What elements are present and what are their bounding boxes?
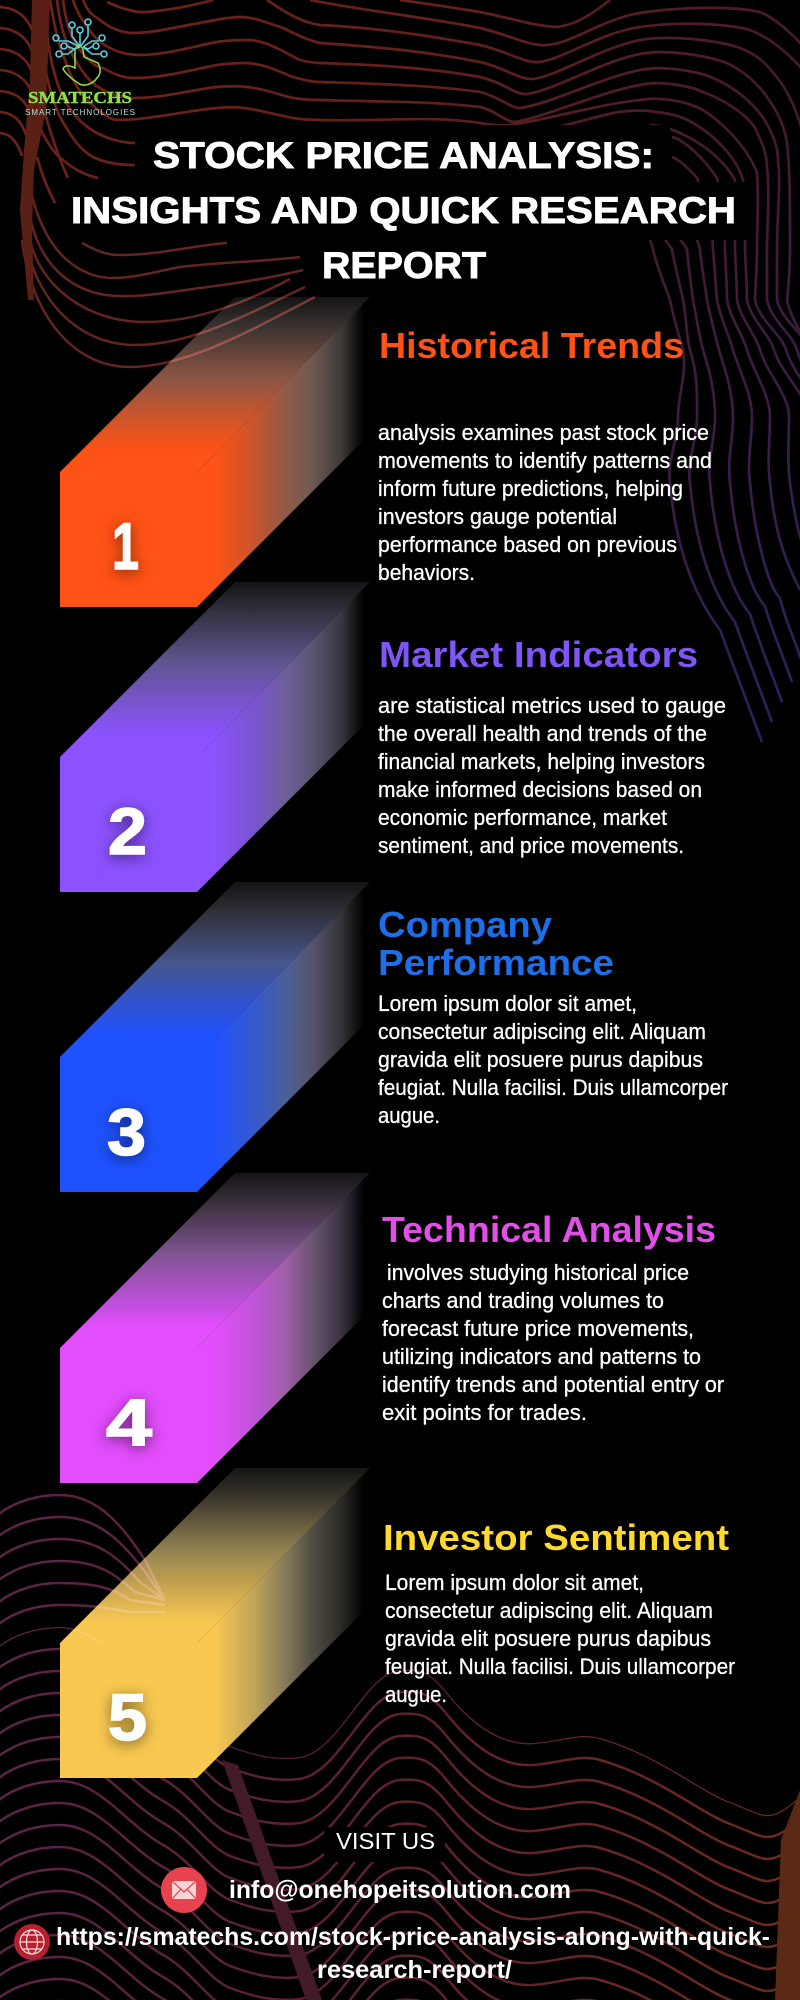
body [378, 991, 728, 1128]
visit us: VISIT US [336, 1828, 435, 1854]
heading: Technical Analysis [382, 1209, 716, 1250]
body: feugiat. Nulla facilisi. Duis ullamcorper [378, 1075, 728, 1100]
heading: Historical Trends [379, 325, 684, 366]
wave lines: top and right [0, 0, 800, 742]
body: performance based on previous [378, 532, 677, 557]
body: augue. [385, 1682, 447, 1707]
title [56, 125, 750, 295]
block 5 [60, 1468, 370, 1778]
block 3: 3 [107, 1095, 146, 1169]
body: analysis examines past stock price [378, 420, 709, 445]
block 1: 1 [112, 509, 139, 583]
block 4 [60, 1173, 370, 1483]
icon: circuit hand [53, 19, 107, 85]
body: augue. [378, 1103, 440, 1128]
block 1 [60, 297, 370, 607]
section 2 text [378, 634, 726, 858]
body: sentiment, and price movements. [378, 833, 684, 858]
heading: Market Indicators [379, 634, 698, 675]
body: behaviors. [378, 560, 475, 585]
title: REPORT [322, 245, 486, 286]
body: economic performance, market [378, 805, 667, 830]
logo name: SMATECHS [28, 88, 132, 107]
block 3 [60, 882, 370, 1192]
body: identify trends and potential entry or [382, 1372, 724, 1397]
block 2: 2 [108, 794, 147, 868]
body: Lorem ipsum dolor sit amet, [385, 1570, 644, 1595]
body: consectetur adipiscing elit. Aliquam [385, 1598, 713, 1623]
body [382, 1260, 724, 1425]
body: forecast future price movements, [382, 1316, 694, 1341]
section 3 text [378, 904, 728, 1128]
heading: Performance [378, 942, 614, 983]
body: movements to identify patterns and [378, 448, 712, 473]
block 4: 4 [106, 1385, 152, 1459]
body: feugiat. Nulla facilisi. Duis ullamcorper [385, 1654, 735, 1679]
email address: info@onehopeitsolution.com [229, 1876, 571, 1904]
block 2 [60, 582, 370, 892]
body [385, 1570, 735, 1707]
footer contact [14, 1827, 770, 1984]
body: investors gauge potential [378, 504, 617, 529]
body: the overall health and trends of the [378, 721, 707, 746]
body: gravida elit posuere purus dapibus [378, 1047, 703, 1072]
body: exit points for trades. [382, 1400, 587, 1425]
section 5 text [383, 1517, 735, 1707]
section 4 text [382, 1209, 724, 1425]
heading: Investor Sentiment [383, 1517, 729, 1558]
body: financial markets, helping investors [378, 749, 705, 774]
body: make informed decisions based on [378, 777, 702, 802]
icon: globe [14, 1924, 50, 1960]
body: charts and trading volumes to [382, 1288, 664, 1313]
body: utilizing indicators and patterns to [382, 1344, 701, 1369]
visit us [324, 1827, 445, 1862]
title: STOCK PRICE ANALYSIS: [153, 135, 654, 176]
body [378, 420, 712, 585]
logo [25, 19, 135, 117]
website url [56, 1923, 770, 1984]
heading [378, 904, 614, 983]
heading: Company [378, 904, 552, 945]
website url: research-report/ [317, 1956, 512, 1984]
block 5: 5 [108, 1680, 147, 1754]
logo tagline: SMART TECHNOLOGIES [25, 108, 135, 117]
body: consectetur adipiscing elit. Aliquam [378, 1019, 706, 1044]
wave field: bottom repeat [0, 1620, 800, 2000]
section 1 text [378, 325, 712, 585]
wave lines: bowl under title [22, 187, 315, 367]
icon: email [161, 1867, 207, 1913]
body: are statistical metrics used to gauge [378, 693, 726, 718]
wave lines: bottom [0, 1495, 165, 1627]
body [378, 693, 726, 858]
body: inform future predictions, helping [378, 476, 683, 501]
body: involves studying historical price [387, 1260, 689, 1285]
title: INSIGHTS AND QUICK RESEARCH [71, 190, 736, 231]
body: gravida elit posuere purus dapibus [385, 1626, 711, 1651]
body: Lorem ipsum dolor sit amet, [378, 991, 637, 1016]
website url: https://smatechs.com/stock-price-analysis-along-with-quick- [56, 1923, 770, 1951]
